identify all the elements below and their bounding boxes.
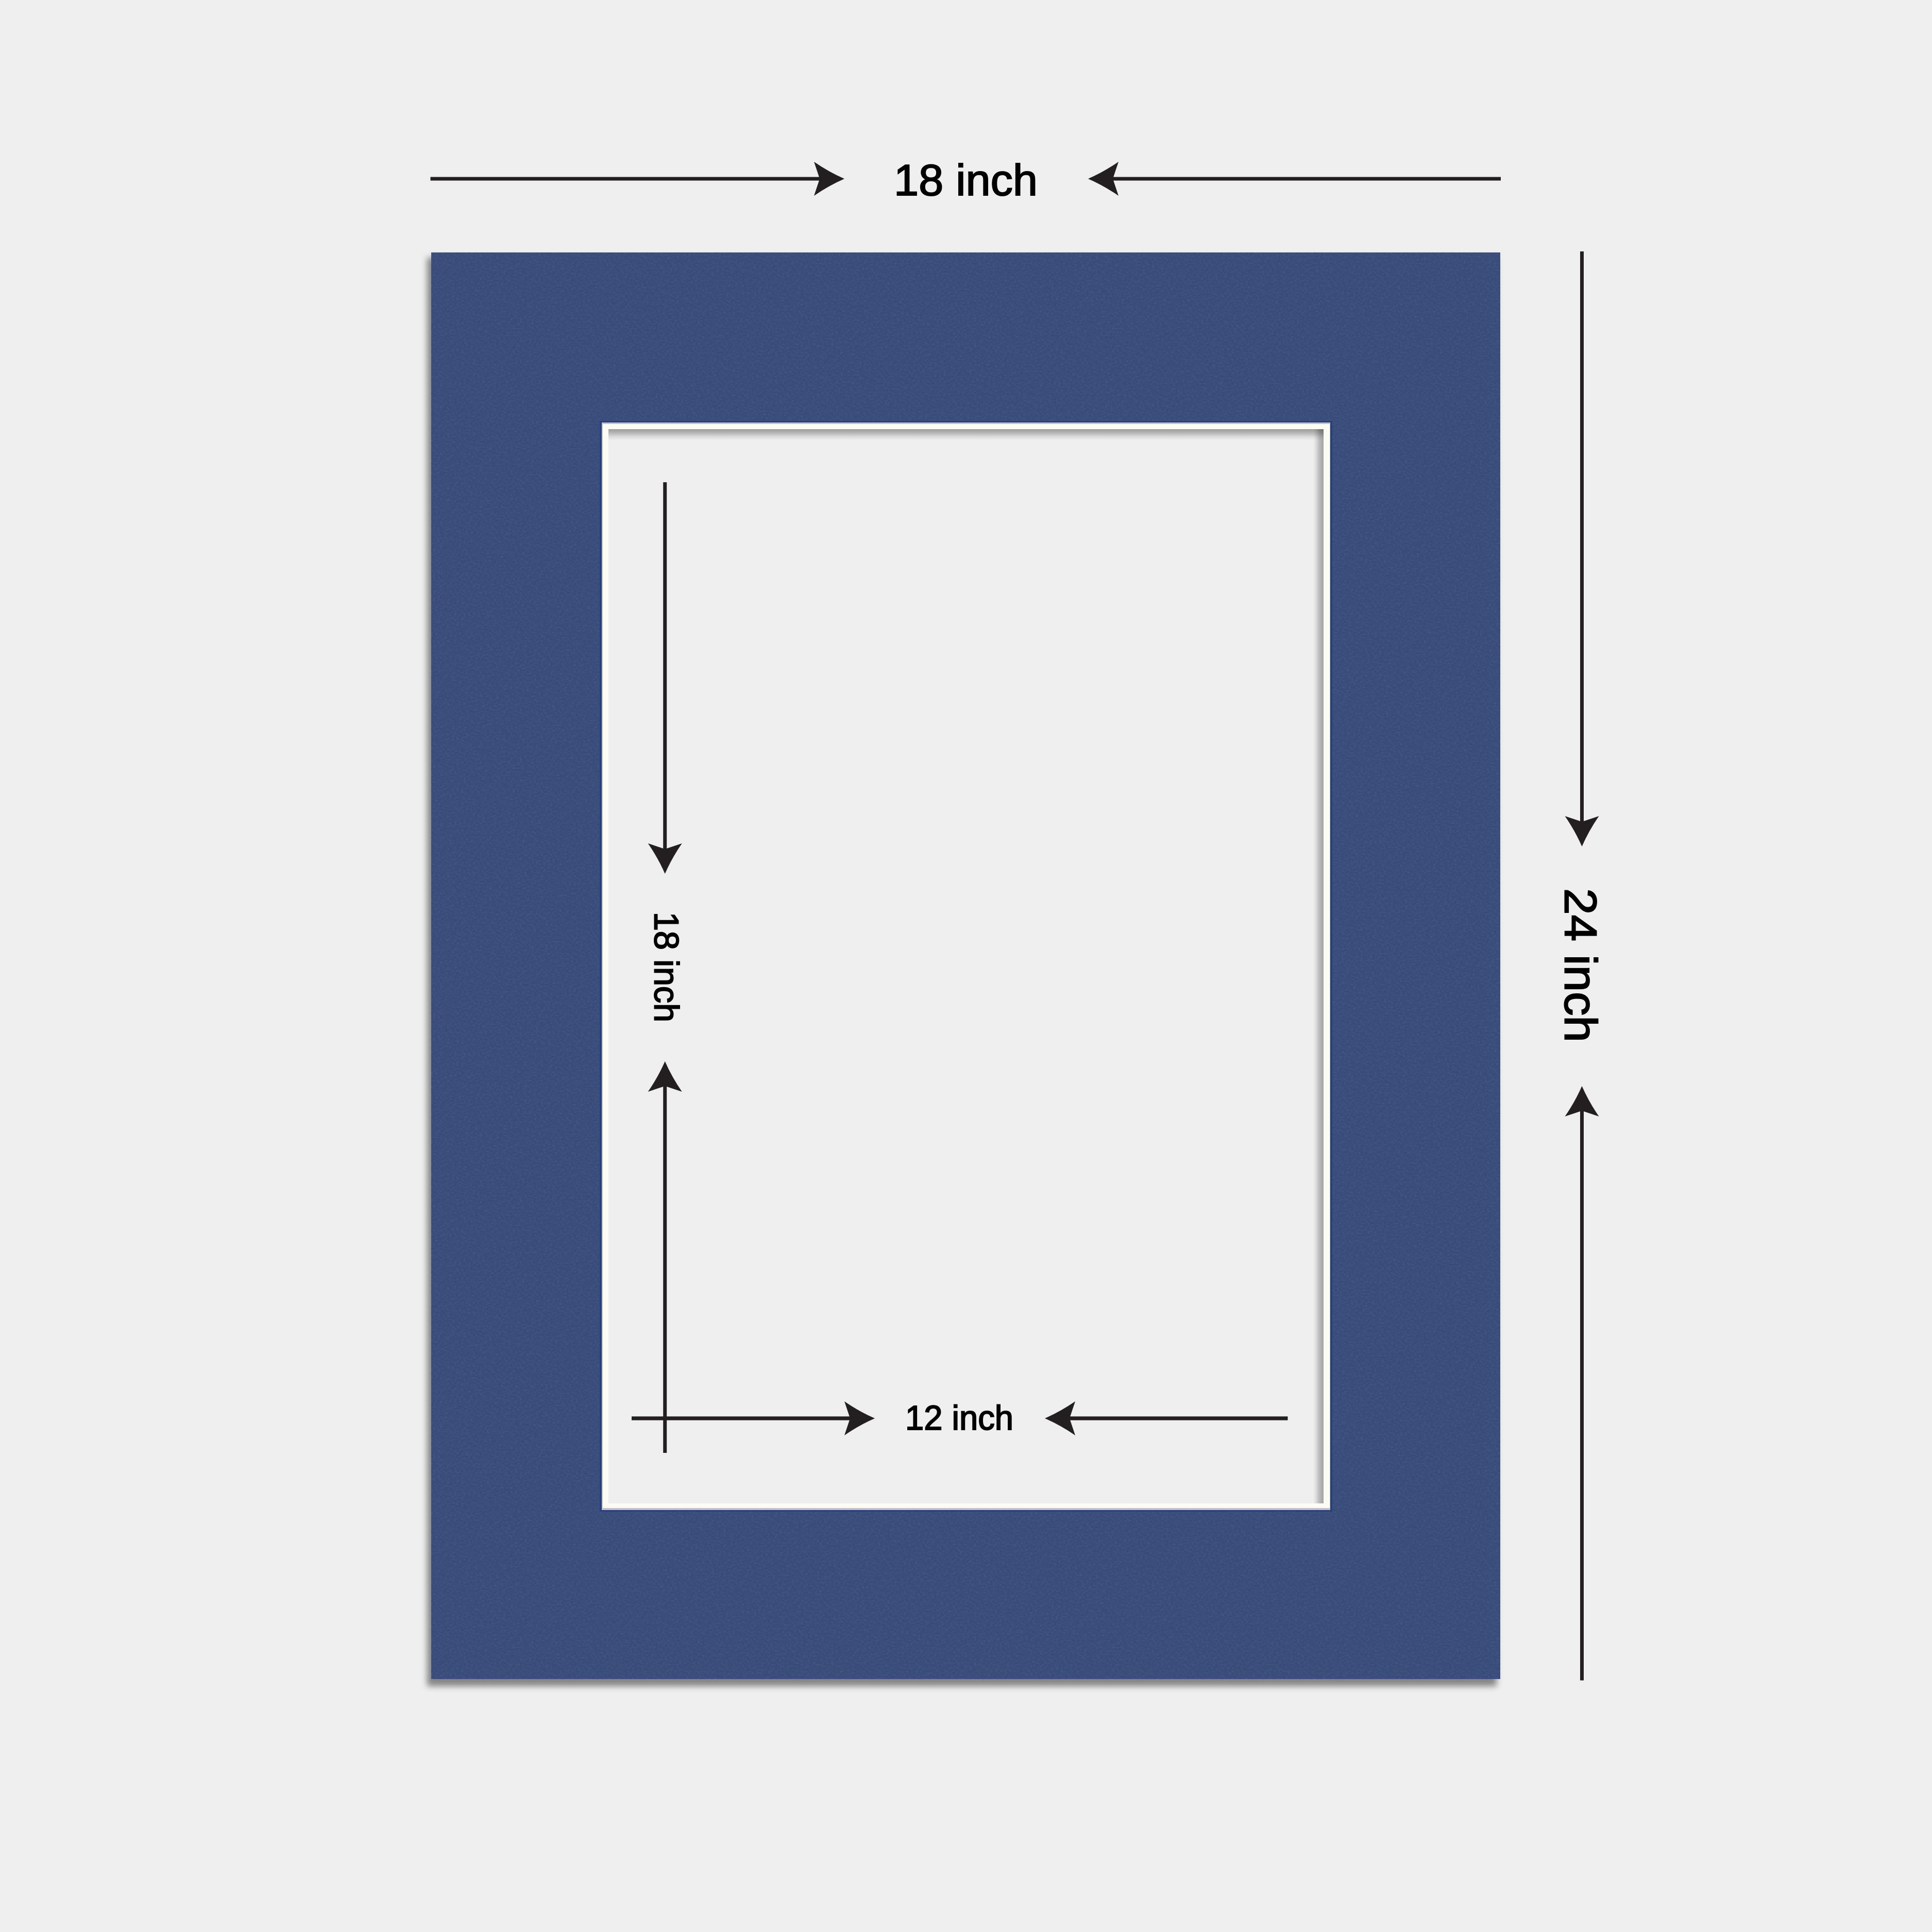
board surface (431, 252, 1500, 1679)
window cream core (603, 424, 1330, 1508)
label: outer width: 18 inch (894, 156, 1038, 205)
label: window width: 12 inch (905, 1399, 1013, 1437)
arrow: window height, bottom (648, 1061, 682, 1453)
arrow: window height, top (648, 482, 682, 874)
window dark cut edge (600, 421, 1332, 1512)
arrow: outer height, bottom (1565, 1086, 1599, 1681)
label: window height: 18 inch (647, 912, 686, 1022)
arrow: window width, left (632, 1401, 875, 1435)
window right inner shadow (1313, 429, 1324, 1503)
label: outer height: 24 inch (1555, 888, 1606, 1042)
board drop shadow (427, 258, 1497, 1686)
arrow: outer width, right (1088, 162, 1501, 196)
board paper texture (431, 252, 1500, 1679)
arrow: window width, right (1045, 1401, 1288, 1435)
panel: blue mat board with window opening (427, 252, 1500, 1686)
arrow: outer width, left (431, 162, 844, 196)
window opening (608, 429, 1324, 1503)
window top inner shadow (608, 429, 1324, 440)
window bevel (602, 422, 1330, 1510)
arrow: outer height, top (1565, 251, 1599, 846)
